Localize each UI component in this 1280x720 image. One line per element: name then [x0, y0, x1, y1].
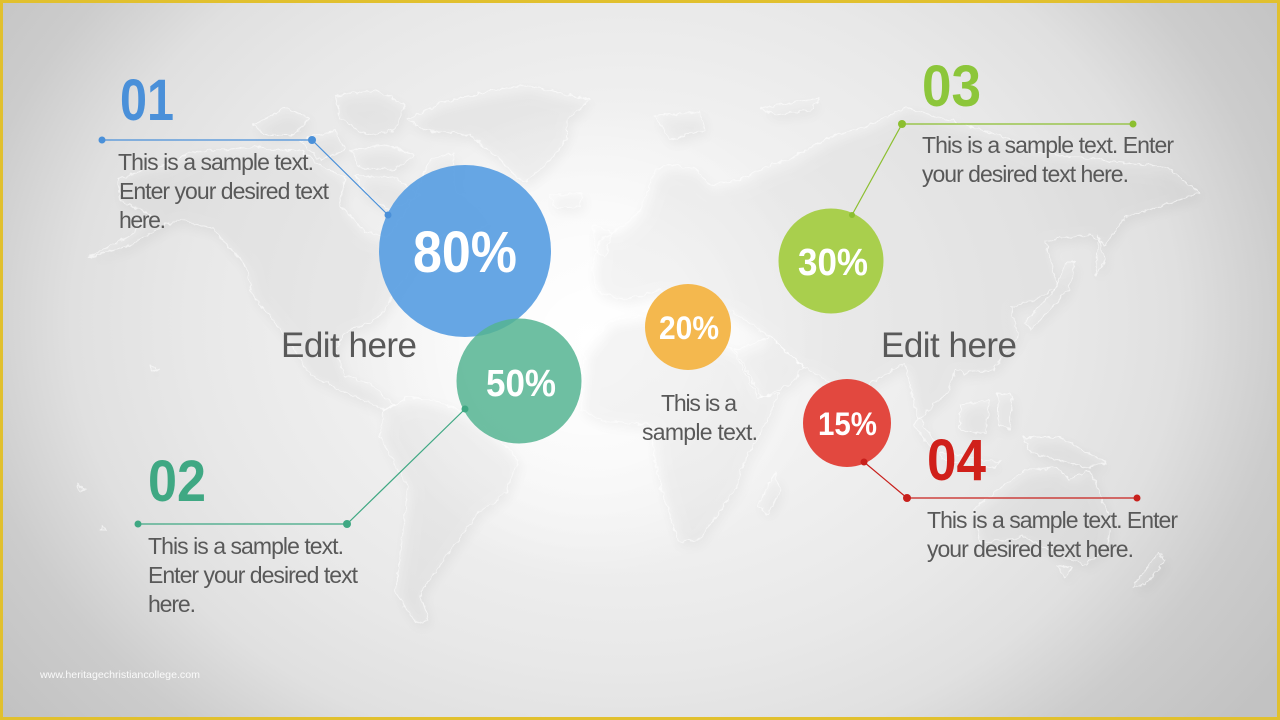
circle 80%	[379, 165, 551, 337]
connector 03	[849, 120, 1136, 218]
heading 03: 03	[922, 54, 981, 119]
text block 01: This is a sample text.	[118, 149, 314, 175]
text block center: sample text.	[642, 419, 758, 445]
text block 02	[148, 533, 359, 617]
connector 04	[860, 458, 1140, 502]
text block 04: This is a sample text. Enter	[927, 507, 1178, 533]
circle 30%: 30%	[798, 242, 868, 284]
world map	[78, 85, 1203, 628]
text block 03	[922, 132, 1174, 187]
circle 15%	[803, 379, 891, 467]
text block center: This is a	[661, 390, 737, 416]
connector 02	[134, 406, 468, 528]
text block 02: here.	[148, 591, 196, 617]
text block 01: Enter your desired text	[119, 178, 330, 204]
circle 20%: 20%	[659, 310, 719, 346]
text block 01: here.	[119, 207, 166, 233]
text block 02: This is a sample text.	[148, 533, 344, 559]
label right: edit here: Edit here	[881, 326, 1017, 365]
watermark: www.heritagechristiancollege.com	[39, 670, 200, 681]
text block 03: This is a sample text. Enter	[922, 132, 1174, 158]
text block 02: Enter your desired text	[148, 562, 359, 588]
heading 01: 01	[120, 68, 174, 133]
circle 50%: 50%	[486, 363, 556, 405]
background glow	[350, 100, 830, 580]
text block 04	[927, 507, 1178, 562]
label left: edit here: Edit here	[281, 326, 417, 365]
heading 04: 04	[927, 428, 986, 493]
text block 01	[118, 149, 330, 233]
circle 50%	[456, 318, 582, 444]
circle 15%: 15%	[818, 406, 877, 442]
circle 20%	[645, 284, 731, 370]
circle 30%	[778, 208, 884, 314]
circle 80%: 80%	[413, 220, 517, 285]
connector 01	[98, 136, 392, 218]
heading 02: 02	[148, 449, 206, 514]
text block 04: your desired text here.	[927, 536, 1134, 562]
text block 03: your desired text here.	[922, 161, 1129, 187]
text block center	[642, 390, 758, 445]
